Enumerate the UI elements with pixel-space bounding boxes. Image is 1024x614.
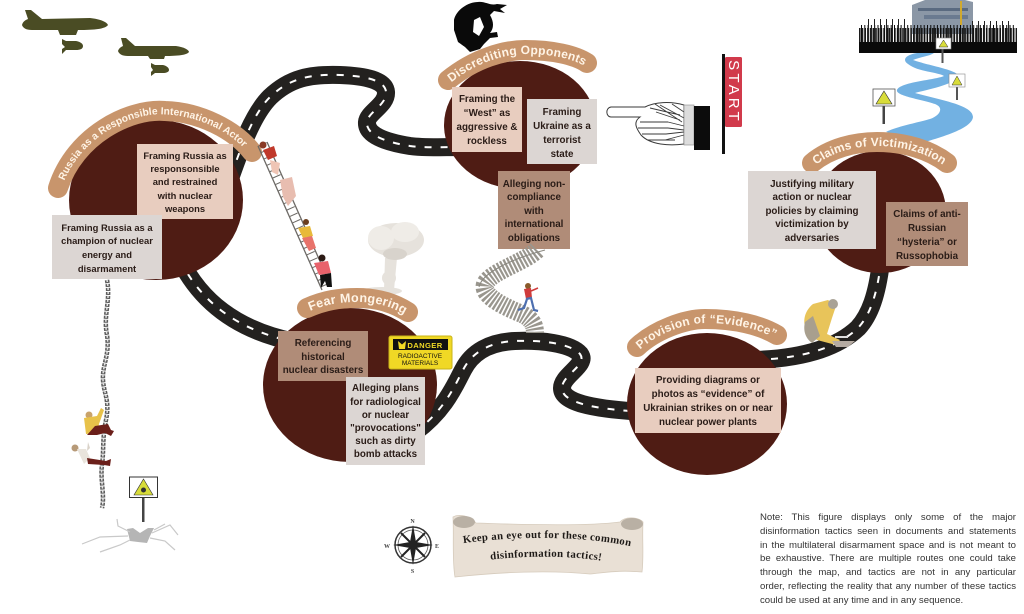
text box: radiological provocations: for radiological	[350, 397, 421, 408]
icon: planes and bombs	[22, 10, 189, 76]
text box: champion of nuclear energy: energy and	[82, 249, 132, 260]
icon: hazard sign near forest	[936, 38, 951, 63]
climber 3	[298, 219, 316, 251]
text box: anti-Russian hysteria: Russian	[908, 223, 946, 234]
road: Russia to Discrediting Opponents	[226, 75, 465, 190]
road: Provision of Evidence to Claims of Victimization	[755, 262, 881, 360]
text box: radiological provocations: bomb attacks	[354, 449, 418, 460]
text box: Ukraine terrorist state: terrorist	[543, 135, 582, 146]
icon: hazard sign left of river	[873, 89, 895, 124]
text box: Ukraine terrorist state: Ukraine as a	[533, 121, 591, 132]
text box: justifying military action	[748, 171, 876, 249]
text box: anti-Russian hysteria	[886, 202, 968, 266]
text box: historical disasters	[278, 331, 368, 381]
start flag	[722, 54, 742, 154]
text box: anti-Russian hysteria: “hysteria” or	[897, 237, 957, 248]
banner: Claims: Claims of Victimization	[813, 137, 945, 164]
text box: historical disasters: nuclear disasters	[283, 365, 364, 376]
icon: builder on road	[804, 299, 855, 347]
runner	[518, 283, 538, 311]
note text: through the map, and tactics are not in any particular	[760, 567, 1016, 578]
banner: Russia: Russia as a Responsible International Actor	[58, 107, 247, 180]
text box: radiological provocations	[346, 377, 425, 465]
blob: Russia	[69, 120, 243, 280]
road: Fear Mongering to Provision of Evidence	[415, 341, 645, 432]
icon: hazard sign at crack	[130, 477, 158, 522]
text box: justifying military action: adversaries	[785, 233, 840, 244]
text box: responsible and restrained: Framing Russia as	[143, 150, 227, 161]
text box: radiological provocations: or nuclear	[362, 410, 409, 421]
note text: in the multilateral disarmament space and is not meant to	[760, 540, 1016, 550]
panel: Claims of Victimization	[748, 53, 973, 273]
icon: monster silhouette	[454, 2, 507, 52]
text box: justifying military action: victimization by	[775, 219, 849, 230]
blob: Provision	[627, 333, 787, 475]
text box: non-compliance: international	[505, 219, 564, 230]
icon: danger sign: DANGER	[407, 341, 443, 350]
text box: diagrams or photos: photos as “evidence” of	[652, 389, 765, 400]
banner: Russia	[48, 100, 262, 198]
text box: responsible and restrained: responsonsible	[150, 163, 220, 174]
text box: responsible and restrained	[137, 144, 233, 219]
icon: danger sign	[389, 336, 452, 369]
icon: forest and building	[859, 0, 1017, 53]
icon: compass rose: S	[411, 569, 415, 575]
road: Russia to Fear Mongering	[180, 260, 295, 342]
text box: diagrams or photos: Ukrainian strikes on or near	[643, 403, 773, 414]
note text: be exhaustive. There are multiple routes one could take	[760, 553, 1016, 564]
text box: Ukraine terrorist state: state	[551, 149, 574, 160]
text box: champion of nuclear energy	[52, 215, 162, 279]
river	[886, 53, 973, 142]
note text: disinformation tactics seen in documents and statements	[760, 526, 1016, 537]
climber upper	[84, 408, 114, 436]
text box: radiological provocations: Alleging plans	[352, 383, 420, 394]
text box: Ukraine terrorist state: Framing	[543, 107, 581, 118]
text box: responsible and restrained: and restrained	[153, 176, 218, 187]
icon: compass rose	[384, 519, 439, 575]
text box: West	[452, 87, 522, 152]
blob: Fear Mongering	[263, 308, 437, 462]
icon: hazard sign on river	[949, 74, 965, 100]
panel: Russia as a Responsible International Actor	[48, 100, 262, 280]
icon: compass rose: E	[435, 544, 439, 550]
blob: Discrediting	[444, 61, 596, 189]
text box: non-compliance: with	[523, 206, 544, 217]
banner: Provision: Provision of “Evidence”	[635, 314, 778, 349]
text box: anti-Russian hysteria: Claims of anti-	[893, 209, 961, 220]
blob: Claims	[814, 151, 946, 273]
text box: non-compliance	[498, 171, 570, 249]
text box: diagrams or photos: nuclear power plants	[659, 417, 758, 428]
icon: mushroom cloud	[362, 222, 424, 295]
icon: pointing hand	[607, 103, 710, 150]
text box: responsible and restrained: weapons	[164, 203, 205, 214]
text box: West: rockless	[467, 136, 507, 147]
text box: West: aggressive &	[456, 122, 518, 133]
text box: radiological provocations: such as dirty	[355, 436, 416, 447]
climber 2	[280, 177, 296, 206]
icon: danger sign: RADIOACTIVE	[398, 353, 443, 360]
icon: compass rose: W	[384, 544, 390, 550]
text box: historical disasters: Referencing	[295, 338, 351, 349]
note text: Note: This figure displays only some of the major	[760, 512, 1016, 523]
text box: champion of nuclear energy: disarmament	[78, 263, 136, 274]
panel: Fear Mongering	[263, 222, 452, 465]
banner: Fear Mongering	[297, 288, 418, 322]
text box: Ukraine terrorist state	[527, 99, 597, 164]
scroll text: Keep an eye out for these common	[462, 530, 631, 546]
climber lower	[72, 442, 111, 466]
text box: West: “West” as	[464, 108, 511, 119]
text box: responsible and restrained: with nuclear	[157, 190, 213, 201]
icon: ground crack	[82, 519, 178, 552]
note text	[760, 512, 1016, 606]
text box: justifying military action: action or nuclear	[773, 192, 852, 203]
text box: justifying military action: policies by claiming	[765, 206, 859, 217]
text box: non-compliance: obligations	[508, 233, 561, 244]
staircase with runner	[479, 250, 545, 333]
scroll text	[462, 530, 631, 561]
text box: champion of nuclear energy: Framing Russia as a	[61, 222, 153, 233]
banner: Fear Mongering: Fear Mongering	[308, 293, 407, 316]
ladder with climbers	[258, 142, 332, 290]
climber 4	[314, 254, 332, 288]
text box: diagrams or photos: Providing diagrams or	[656, 375, 760, 386]
text box: historical disasters: historical	[301, 352, 345, 363]
text box: radiological provocations: "provocations"	[350, 423, 421, 434]
scroll text: disinformation tactics!	[490, 549, 602, 561]
scroll banner	[452, 515, 644, 578]
text box: West: Framing the	[459, 94, 516, 105]
panel: Provision of Evidence	[627, 309, 787, 475]
note text: could be used at any time and in any sequence.	[760, 594, 963, 606]
climber 1	[260, 142, 280, 175]
icon: compass rose: N	[410, 519, 415, 525]
panel: Discrediting Opponents	[438, 40, 597, 249]
text box: champion of nuclear energy: champion of nuclear	[61, 235, 153, 246]
chain with climbers	[72, 280, 114, 508]
start flag: START	[725, 60, 742, 124]
text box: non-compliance: compliance	[507, 192, 562, 203]
banner: Discrediting: Discrediting Opponents	[447, 46, 586, 82]
text box: justifying military action: Justifying military	[770, 179, 854, 190]
text box: diagrams or photos	[635, 368, 781, 433]
text box: non-compliance: Alleging non-	[503, 179, 565, 190]
text box: anti-Russian hysteria: Russophobia	[896, 251, 959, 262]
note text: order, reflecting the reality that any number of these tactics	[760, 581, 1016, 592]
icon: danger sign: MATERIALS	[402, 360, 439, 367]
